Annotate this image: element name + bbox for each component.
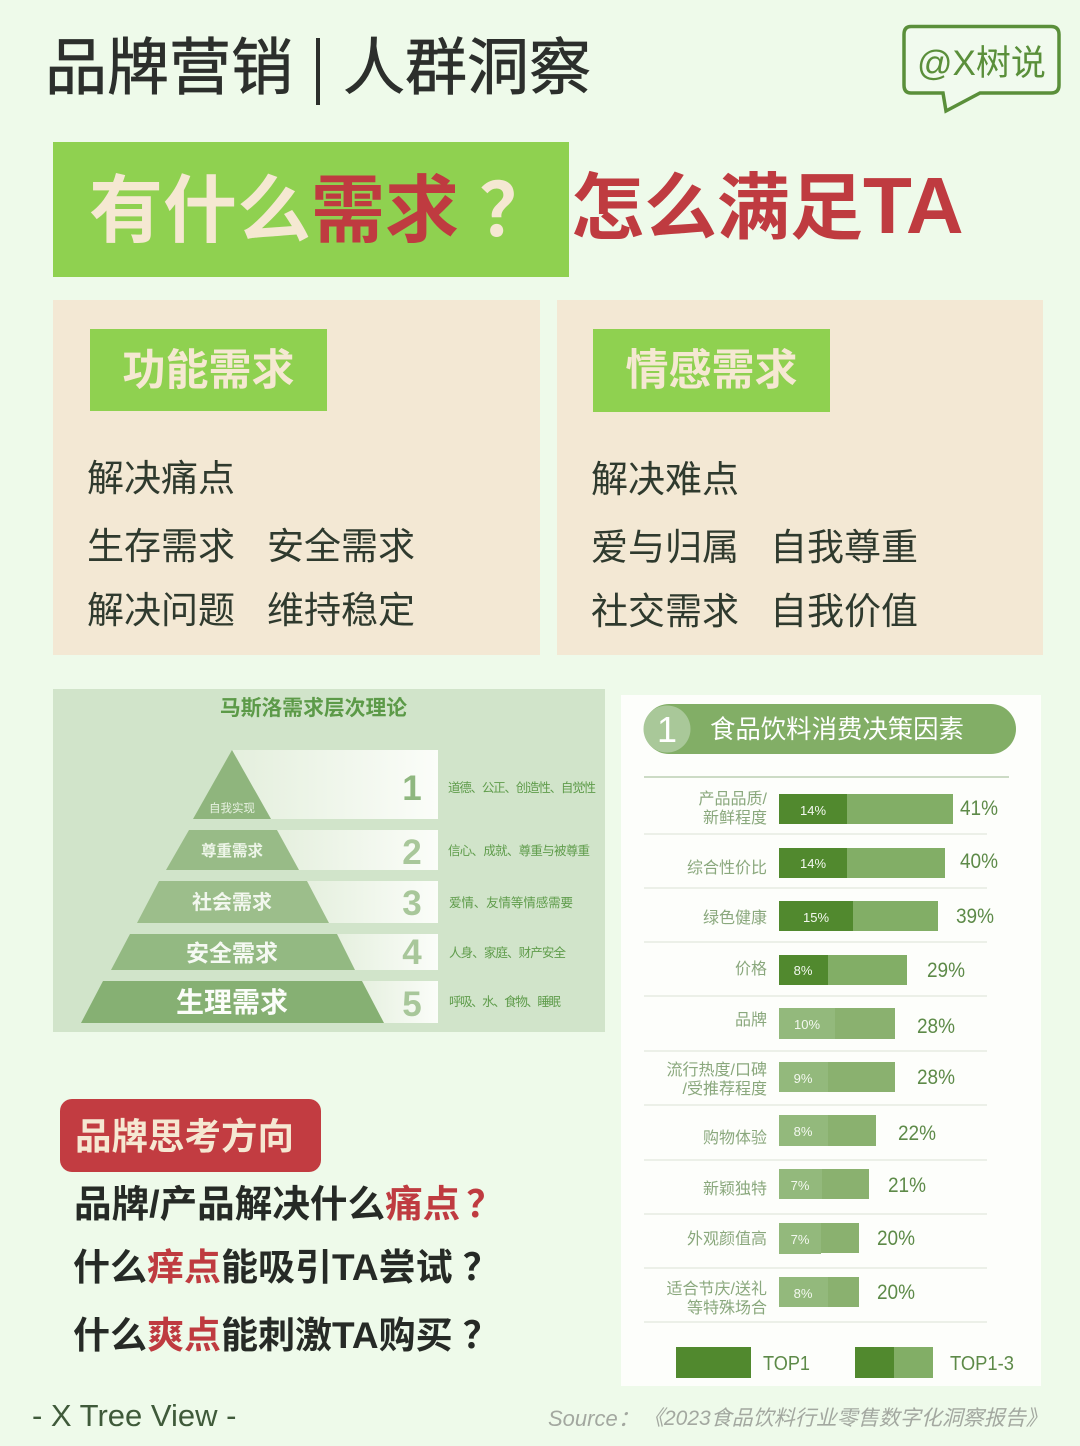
row: health: 绿色健康 bbox=[703, 909, 767, 927]
row: quality: 产品品质/ bbox=[699, 790, 768, 808]
banner: headline bbox=[53, 142, 964, 277]
logo: speech bubble: @X树说 bbox=[917, 44, 1046, 83]
need line 2: 生存需求 安全需求 bbox=[87, 526, 415, 567]
question 2: 什么痒点能吸引TA尝试 ？ bbox=[73, 1247, 500, 1288]
row: quality bbox=[699, 790, 998, 827]
tag: functional needs: 功能需求 bbox=[122, 347, 294, 395]
tag: emotional needs bbox=[593, 329, 830, 412]
tier 4: 人身、家庭、财产安全 bbox=[449, 945, 566, 960]
tier 1 bbox=[193, 750, 596, 819]
row: appearance: 7% bbox=[791, 1232, 810, 1247]
row: novelty: 新颖独特 bbox=[703, 1180, 767, 1198]
row: popularity: 流行热度/口碑 bbox=[667, 1061, 767, 1079]
row: popularity: 28% bbox=[917, 1066, 955, 1089]
panel: food and beverage decision factors chart bbox=[621, 695, 1041, 1386]
row: novelty: 21% bbox=[888, 1174, 926, 1197]
row: popularity bbox=[667, 1061, 955, 1098]
row: brand: 28% bbox=[917, 1015, 955, 1038]
row: brand bbox=[735, 1008, 955, 1039]
tier 2: 信心、成就、尊重与被尊重 bbox=[448, 843, 590, 858]
tier 2: 尊重需求 bbox=[201, 841, 263, 860]
Maslow heading: 马斯洛需求层次理论 bbox=[220, 697, 407, 720]
row: festive occasions bbox=[667, 1277, 915, 1317]
row: price: 8% bbox=[794, 963, 813, 978]
legend: TOP1 bbox=[763, 1353, 810, 1375]
row: novelty bbox=[703, 1169, 926, 1199]
tier 4 bbox=[111, 933, 566, 972]
chart heading pill: 1 bbox=[657, 709, 677, 750]
headline left: 有什么需求 ？ bbox=[89, 169, 553, 252]
row: price bbox=[735, 955, 965, 985]
need line 1: 解决难点 bbox=[591, 459, 739, 500]
question block bbox=[73, 1183, 504, 1356]
row: popularity: 9% bbox=[794, 1071, 813, 1086]
title: 品牌营销 bbox=[45, 34, 293, 103]
tier 4: 安全需求 bbox=[186, 940, 278, 966]
tier 2 bbox=[166, 830, 590, 872]
tier 5: 5 bbox=[402, 985, 422, 1024]
row: shopping experience bbox=[703, 1115, 936, 1147]
row: shopping experience: 8% bbox=[794, 1124, 813, 1139]
banner background bbox=[53, 142, 569, 277]
tier 1: 1 bbox=[402, 769, 422, 808]
row: popularity: /受推荐程度 bbox=[683, 1080, 767, 1098]
row: health: 39% bbox=[956, 905, 994, 928]
need line 2: 爱与归属 自我尊重 bbox=[591, 527, 918, 568]
tier 5: 生理需求 bbox=[176, 987, 288, 1018]
tier 3: 3 bbox=[402, 884, 422, 923]
need line 3: 社交需求 自我价值 bbox=[591, 591, 918, 632]
headline right: 怎么满足TA bbox=[571, 161, 964, 250]
tier 3: 社会需求 bbox=[192, 891, 272, 914]
row: health bbox=[703, 901, 994, 931]
question 1: 品牌/产品解决什么痛点？ bbox=[74, 1183, 504, 1225]
tag: functional needs bbox=[90, 329, 327, 411]
tag: brand thinking: 品牌思考方向 bbox=[75, 1116, 294, 1157]
title: 人群洞察 bbox=[343, 34, 591, 103]
row: brand: 10% bbox=[794, 1017, 820, 1032]
title bbox=[45, 34, 591, 105]
tier 1: 道德、公正、创造性、自觉性 bbox=[448, 780, 596, 795]
panel: Maslow pyramid chart bbox=[53, 689, 605, 1032]
footer brand: - X Tree View - bbox=[32, 1398, 236, 1433]
legend bbox=[676, 1347, 1014, 1378]
row: appearance: 20% bbox=[877, 1227, 915, 1250]
tier 3 bbox=[137, 881, 573, 923]
row: price: 29% bbox=[927, 959, 965, 982]
tier 5 bbox=[81, 981, 561, 1024]
row: value: 14% bbox=[800, 856, 826, 871]
panel: emotional needs bbox=[557, 300, 1043, 655]
row: price: 价格 bbox=[735, 960, 767, 978]
logo: speech bubble bbox=[902, 24, 1061, 114]
row: value: 40% bbox=[960, 850, 998, 873]
row: festive occasions: 等特殊场合 bbox=[687, 1299, 767, 1317]
tag: brand thinking bbox=[60, 1099, 321, 1172]
source note: Source： bbox=[548, 1406, 640, 1431]
row: value bbox=[687, 848, 998, 878]
row: value: 综合性价比 bbox=[687, 859, 767, 877]
row: festive occasions: 20% bbox=[877, 1281, 915, 1304]
row: quality: 新鲜程度 bbox=[703, 809, 767, 827]
legend: TOP1-3 bbox=[950, 1353, 1014, 1375]
row: appearance bbox=[687, 1223, 915, 1254]
row: brand: 品牌 bbox=[735, 1011, 767, 1029]
chart heading pill bbox=[644, 704, 1016, 754]
row: festive occasions: 8% bbox=[794, 1286, 813, 1301]
tier 2: 2 bbox=[402, 833, 422, 872]
need line 1: 解决痛点 bbox=[87, 458, 235, 499]
row: shopping experience: 购物体验 bbox=[703, 1129, 767, 1147]
row: novelty: 7% bbox=[791, 1178, 810, 1193]
question 3: 什么爽点能刺激TA购买 ？ bbox=[73, 1315, 500, 1356]
need line 3: 解决问题 维持稳定 bbox=[87, 590, 415, 631]
tag: emotional needs: 情感需求 bbox=[626, 347, 798, 395]
row: quality: 14% bbox=[800, 803, 826, 818]
row: appearance: 外观颜值高 bbox=[687, 1230, 767, 1248]
tier 3: 爱情、友情等情感需要 bbox=[449, 895, 573, 910]
row: shopping experience: 22% bbox=[898, 1122, 936, 1145]
row: health: 15% bbox=[803, 910, 829, 925]
row: festive occasions: 适合节庆/送礼 bbox=[667, 1280, 767, 1298]
row: quality: 41% bbox=[960, 797, 998, 820]
chart heading pill: 食品饮料消费决策因素 bbox=[710, 716, 964, 744]
tier 1: 自我实现 bbox=[209, 801, 255, 815]
panel: functional needs bbox=[53, 300, 540, 655]
tier 5: 呼吸、水、食物、睡眠 bbox=[449, 994, 561, 1009]
tier 4: 4 bbox=[402, 933, 422, 972]
source note: 《2023食品饮料行业零售数字化洞察报告》 bbox=[643, 1407, 1047, 1430]
